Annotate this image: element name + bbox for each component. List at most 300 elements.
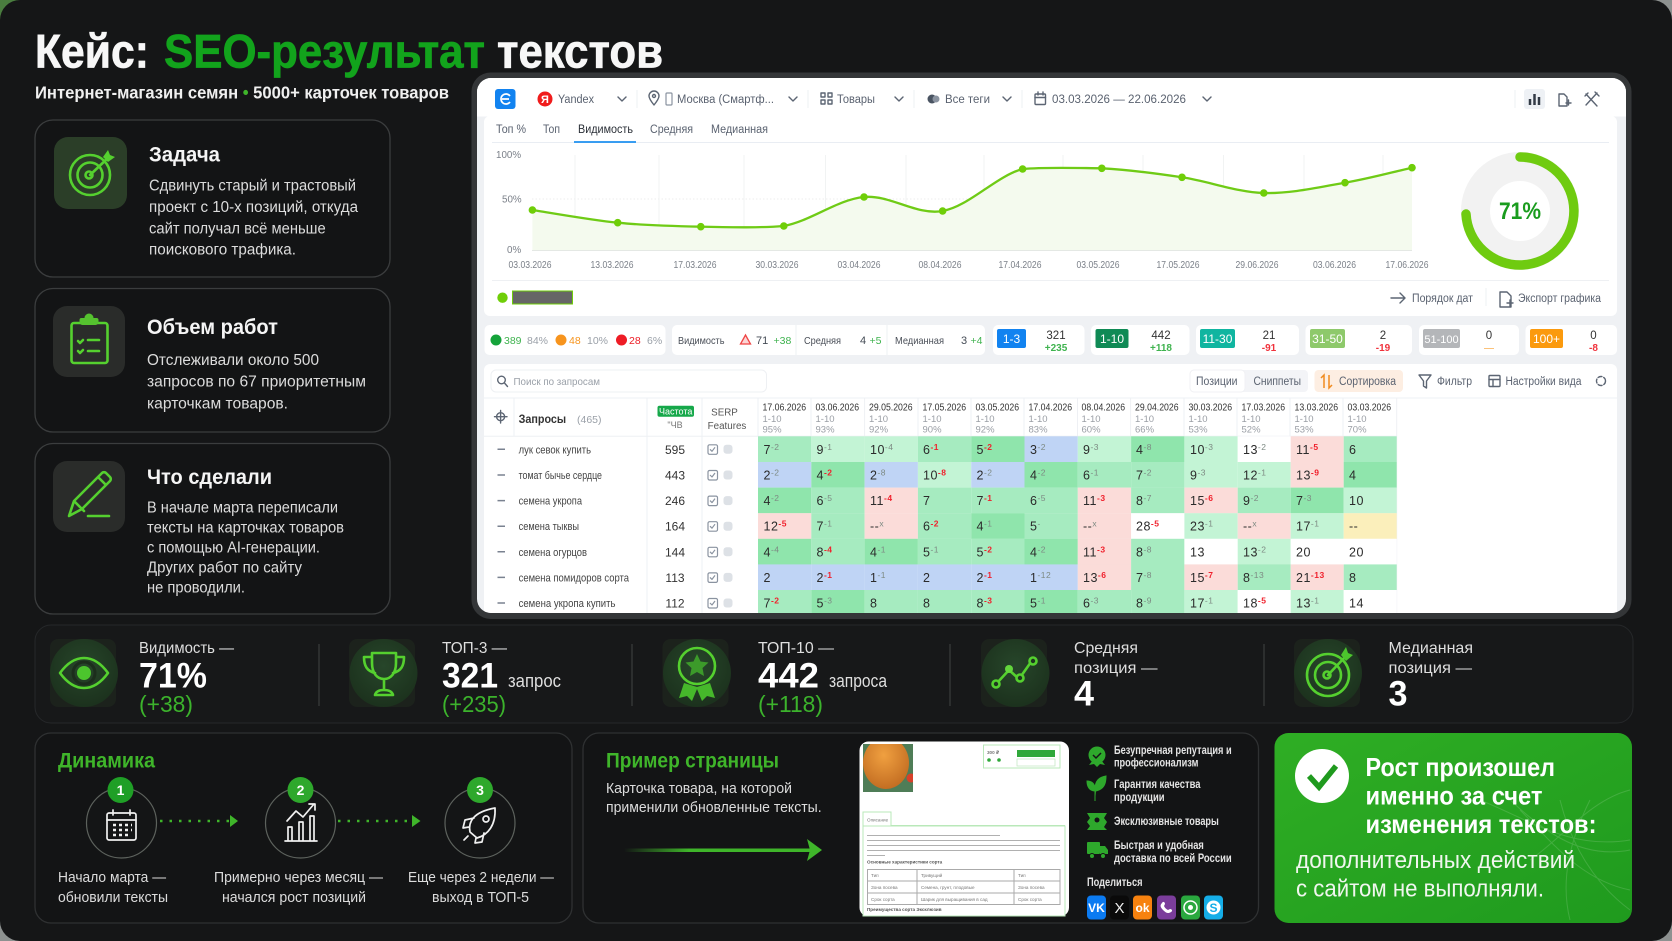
buy box: 300 ₽	[987, 750, 1000, 755]
callout heading: изменения текстов:	[1366, 809, 1596, 839]
table header: 1-10	[1028, 414, 1048, 425]
table header: 1-10	[1082, 414, 1101, 425]
table row: семена огурцов: -1	[930, 544, 939, 554]
table header: 13.03.2026	[1294, 403, 1338, 414]
text: scope	[147, 352, 366, 412]
search box: Поиск по запросам	[514, 376, 600, 388]
table row: семена огурцов: 5	[976, 545, 984, 559]
characteristics table: Шарик для выращивания в сад	[921, 897, 988, 902]
table row: семена укропа: -5	[824, 493, 833, 503]
step 2: growth chart	[214, 777, 383, 906]
table header: 1-10	[976, 414, 995, 425]
table row: семена укропа: семена укропа	[519, 496, 582, 508]
table row: семена укропа купить: 5	[816, 596, 824, 610]
chart tabs: Видимость	[578, 124, 633, 136]
stat: position 11-30: 21	[1263, 330, 1275, 342]
icon: WhatsApp	[1181, 896, 1200, 920]
table row: семена тыквы: -	[1037, 519, 1041, 529]
line chart: visibility: 17.05.2026	[1156, 260, 1200, 271]
table row: семена укропа: 6	[1030, 494, 1037, 508]
table row: семена укропа купить: 17	[1190, 596, 1205, 610]
table header: 03.05.2026	[976, 403, 1019, 414]
table row: семена огурцов: 8	[816, 545, 824, 559]
table row: семена помидоров сорта: 8	[1349, 571, 1356, 585]
table row: семена укропа купить: -1	[1037, 596, 1046, 606]
table row: семена тыквы: x	[879, 519, 884, 529]
table row: лук севок купить: -2	[984, 442, 993, 452]
stat: visibility / mean / median: 3	[961, 335, 967, 347]
table row: семена помидоров сорта: семена помидоров сорта	[519, 572, 629, 584]
toolbar	[477, 78, 1626, 116]
table row: семена укропа купить: 8	[1136, 596, 1143, 610]
metric: visibility: Видимость —	[139, 640, 234, 657]
feature list: доставка по всей России	[1114, 853, 1232, 865]
table row: семена огурцов	[498, 539, 1397, 564]
table row: томат бычье сердце	[498, 462, 1397, 488]
stat: position 100+	[1526, 325, 1617, 355]
table row: томат бычье сердце: -8	[877, 468, 886, 478]
table row: лук севок купить: 3	[1030, 443, 1037, 457]
table row: семена тыквы: -1	[1311, 519, 1319, 529]
metric: median position: 3	[1388, 675, 1408, 714]
stat: position 1-10: 1-10	[1100, 332, 1124, 346]
panel: page example	[583, 733, 1258, 923]
table row: томат бычье сердце: 7	[1136, 468, 1143, 482]
characteristics table	[868, 870, 1060, 904]
line chart: visibility: 08.04.2026	[918, 260, 962, 271]
table row: семена помидоров сорта: -13	[1311, 570, 1325, 580]
table row: семена укропа купить: -3	[984, 596, 993, 606]
step 1: calendar: Начало марта —	[58, 869, 166, 886]
panel: positions table	[484, 364, 1617, 624]
table row: семена огурцов: 144	[665, 545, 685, 559]
toolbar: Я	[541, 94, 549, 106]
metric: median position: позиция —	[1388, 660, 1472, 677]
table row: семена укропа купить: -3	[824, 596, 833, 606]
table header: 1-10	[1135, 414, 1154, 425]
chart tabs: Медианная	[711, 124, 768, 136]
table row: семена тыквы: --	[1083, 520, 1092, 534]
arrow: to page screenshot	[624, 839, 822, 861]
icon: VK: VK	[1088, 901, 1105, 915]
icon: X: X	[1114, 900, 1125, 917]
table row: семена огурцов: -4	[824, 544, 833, 554]
panel: dynamics	[35, 733, 572, 923]
table row: лук севок купить: 9	[816, 443, 824, 457]
table row: томат бычье сердце: -1	[1258, 468, 1266, 478]
text: done	[147, 500, 344, 597]
table header: 03.06.2026	[816, 403, 859, 414]
table row: семена огурцов: 13	[1190, 545, 1205, 559]
stat: position 31-50: 31-50	[1312, 332, 1343, 346]
table row: семена огурцов: 4	[1030, 545, 1037, 559]
metric: visibility: 71%	[139, 657, 207, 696]
table row: томат бычье сердце: -9	[1311, 468, 1319, 478]
table row: томат бычье сердце: 12	[1243, 468, 1258, 482]
stat: position 1-10: +118	[1150, 343, 1172, 354]
table row: семена тыквы: 17	[1296, 520, 1311, 534]
text: scope: карточкам товаров.	[147, 395, 288, 412]
table row: семена помидоров сорта: 15	[1190, 571, 1205, 585]
table row: семена укропа купить: 6	[1083, 596, 1090, 610]
feature list: Гарантия качества	[1114, 779, 1201, 791]
table row: лук севок купить: -3	[1205, 442, 1213, 452]
table row: томат бычье сердце: 443	[665, 468, 685, 482]
table row: семена помидоров сорта: 1	[870, 571, 877, 585]
table row: семена укропа купить: 5	[1030, 596, 1037, 610]
chart tabs: Топ	[543, 124, 560, 136]
table header: 52%	[1242, 425, 1261, 436]
chart tabs	[492, 124, 1609, 142]
table header: 17.04.2026	[1028, 403, 1072, 414]
callout text: дополнительных действий	[1296, 847, 1575, 874]
table row: лук севок купить: 10	[870, 443, 885, 457]
stat: position 11-30: 11-30	[1203, 332, 1233, 346]
stat: position 1-3: 1-3	[1003, 332, 1020, 346]
table row: семена помидоров сорта: 113	[665, 571, 685, 585]
table row: лук севок купить: -2	[771, 442, 780, 452]
table row: семена помидоров сорта: -13	[1250, 570, 1264, 580]
table row: семена укропа купить: -1	[1311, 596, 1319, 606]
table toolbar: Настройки вида	[1506, 376, 1582, 388]
line chart: visibility: 13.03.2026	[590, 260, 634, 271]
icon: clipboard	[53, 306, 125, 377]
table row: томат бычье сердце: 2	[870, 468, 877, 482]
page screenshot	[860, 737, 1069, 916]
table row: семена тыквы: 5	[1030, 520, 1037, 534]
text: page example	[606, 780, 822, 816]
table row: лук севок купить: -1	[930, 442, 939, 452]
metric: median position	[1294, 639, 1473, 714]
table row: семена помидоров сорта: -1	[984, 570, 993, 580]
text: task: поискового трафика.	[149, 242, 296, 259]
metric: visibility: (+38)	[139, 691, 193, 717]
table row: семена огурцов: -3	[1097, 544, 1106, 554]
step 1: calendar	[58, 777, 168, 906]
feature list: профессионализм	[1114, 758, 1198, 770]
heading: dynamics: Динамика	[58, 750, 155, 772]
table row: семена укропа: 11	[1083, 494, 1097, 508]
stat: position 1-3: 321	[1046, 330, 1066, 342]
table header: 1-10	[922, 414, 942, 425]
table header: 53%	[1294, 425, 1314, 436]
stat: position 31-50: -19	[1376, 343, 1391, 354]
table row: лук севок купить	[498, 436, 1397, 462]
icon: pencil	[53, 461, 125, 532]
stat: position 11-30	[1196, 325, 1299, 355]
characteristics table: Зона посева	[871, 885, 898, 890]
metric: median position: Медианная	[1388, 640, 1473, 657]
stat: visibility / mean / median	[672, 325, 985, 355]
table row: томат бычье сердце: -2	[1037, 468, 1046, 478]
icon: Viber	[1157, 896, 1176, 920]
toolbar: Товары	[837, 94, 875, 106]
table header: 1-10	[762, 414, 782, 425]
table header: 30.03.2026	[1188, 403, 1232, 414]
chart footer	[492, 280, 1609, 307]
table header: 17.06.2026	[762, 403, 806, 414]
callout: conclusion	[1274, 733, 1632, 923]
table row: томат бычье сердце: 10	[923, 468, 938, 482]
table row: семена помидоров сорта: 2	[976, 571, 984, 585]
description tab: Описание	[867, 818, 889, 822]
table header: 93%	[816, 425, 835, 436]
text: task: проект с 10-х позиций, откуда	[149, 199, 358, 216]
table row: семена помидоров сорта: 2	[923, 571, 930, 585]
table row: семена укропа купить	[498, 590, 1397, 613]
stat: visibility / mean / median: +4	[970, 335, 983, 347]
table row: семена тыквы	[498, 513, 1397, 539]
table header: Запросы	[519, 412, 566, 426]
chart footer: Экспорт графика	[1518, 293, 1602, 305]
table header: 17.03.2026	[1242, 403, 1285, 414]
table row: семена тыквы: 12	[764, 520, 778, 534]
table header: 1-10	[1294, 414, 1314, 425]
stat: rank counts	[484, 325, 666, 355]
text: scope: Отслеживали около 500	[147, 352, 319, 369]
title: SEO-результат	[164, 24, 485, 78]
table row: семена тыквы: -2	[930, 519, 939, 529]
feature list	[1087, 745, 1232, 865]
feature list: Безупречная репутация и	[1114, 745, 1232, 757]
table row: семена помидоров сорта: 2	[816, 571, 824, 585]
icon: shield badge	[1088, 746, 1106, 767]
metric: average position: позиция —	[1074, 660, 1158, 677]
table row: семена тыквы: 164	[665, 520, 685, 534]
subtitle: Интернет-магазин семян • 5000+ карточек товаров	[35, 82, 449, 102]
feature list: продукции	[1114, 792, 1165, 804]
line chart: visibility: 30.03.2026	[756, 260, 799, 271]
share block	[1087, 877, 1223, 920]
callout heading: именно за счет	[1366, 780, 1543, 810]
text: done: В начале марта переписали	[147, 500, 338, 517]
table row: семена укропа	[498, 488, 1397, 513]
table row: семена тыквы: --	[1243, 520, 1252, 534]
table row: лук севок купить: 6	[923, 443, 930, 457]
heading: task: Задача	[149, 143, 221, 167]
table row: семена укропа: -4	[884, 493, 893, 503]
icon: medal	[662, 639, 731, 707]
table row: семена тыквы: x	[1092, 519, 1097, 529]
icon: exclusive	[1087, 813, 1107, 830]
table row: семена тыквы: 28	[1136, 520, 1151, 534]
table row: лук севок купить: 7	[764, 443, 771, 457]
line chart: visibility: 03.06.2026	[1313, 260, 1356, 271]
step 3: rocket: выход в ТОП-5	[432, 889, 529, 906]
table row: лук севок купить: -1	[824, 442, 833, 452]
table row: семена укропа купить: 13	[1296, 596, 1311, 610]
line chart: visibility: 17.04.2026	[998, 260, 1042, 271]
table row: семена тыквы: -5	[778, 519, 787, 529]
icon: leaf	[1087, 776, 1106, 801]
callout heading: Рост произошел	[1366, 752, 1555, 782]
line chart: visibility: 100%	[496, 150, 521, 161]
table row: томат бычье сердце: 4	[1030, 468, 1037, 482]
title: Кейс:	[35, 24, 149, 78]
stat: position 1-10	[1091, 325, 1190, 355]
table row: лук севок купить: -2	[1258, 442, 1266, 452]
table header: 1-10	[816, 414, 835, 425]
table row: семена тыквы: семена тыквы	[519, 521, 579, 533]
stat: position 100+: 0	[1590, 330, 1597, 342]
donut gauge: 71%: 71%	[1499, 198, 1541, 225]
stat: position 51-100: 51-100	[1424, 334, 1459, 346]
table row: семена укропа: 15	[1190, 494, 1205, 508]
table row: семена укропа: -3	[1097, 493, 1106, 503]
feature list: Эксклюзивные товары	[1114, 816, 1219, 828]
chart tabs: Топ %	[496, 124, 526, 136]
table row: семена укропа купить: -2	[771, 596, 780, 606]
table header: 29.05.2026	[869, 403, 913, 414]
table row: лук севок купить: -3	[1090, 442, 1099, 452]
table header: 1-10	[1242, 414, 1261, 425]
table row: семена помидоров сорта: -7	[1205, 570, 1213, 580]
table header: 92%	[976, 425, 995, 436]
table header: 29.04.2026	[1135, 403, 1179, 414]
stat: rank counts: 389	[504, 335, 522, 347]
table row: семена помидоров сорта: 13	[1083, 571, 1098, 585]
characteristics table: Семена, грунт, плодовые	[921, 885, 975, 890]
stat: rank counts: 6%	[647, 335, 662, 347]
table row: семена помидоров сорта: -6	[1098, 570, 1106, 580]
text: task: сайт получал всё меньше	[149, 220, 326, 237]
stat: rank counts: 84%	[527, 335, 548, 347]
table row: семена огурцов: -8	[1143, 544, 1152, 554]
table row: семена укропа: -5	[1037, 493, 1046, 503]
donut gauge: 71%	[1466, 157, 1574, 265]
table row: семена огурцов: 8	[1136, 545, 1143, 559]
toolbar: Yandex	[558, 94, 594, 106]
table row: семена укропа: -3	[1303, 493, 1312, 503]
characteristics table: Срок сорта	[1018, 897, 1042, 902]
table header: 17.05.2026	[922, 403, 966, 414]
panel: key metrics	[35, 625, 1633, 723]
table row: семена укропа: 8	[1136, 494, 1143, 508]
step 3: rocket: Еще через 2 недели —	[408, 869, 554, 886]
page screenshot: Преимущества сорта Эксклюзив	[867, 907, 942, 912]
table row: семена укропа: 9	[1243, 494, 1250, 508]
table row: семена укропа: 6	[816, 494, 824, 508]
callout text: с сайтом не выполняли.	[1296, 876, 1544, 903]
table header: SERP	[711, 408, 738, 418]
table row: семена укропа купить: семена укропа купить	[519, 598, 616, 610]
table row: семена укропа купить: 8	[976, 596, 984, 610]
heading: done: Что сделали	[147, 465, 272, 489]
table row: лук севок купить: 4	[1136, 443, 1143, 457]
table row: лук севок купить: лук севок купить	[519, 444, 591, 456]
line chart: visibility: 0%	[507, 245, 521, 256]
characteristics table: Зона посева	[1018, 885, 1045, 890]
title: текстов	[497, 24, 663, 78]
description tab: Основные характеристики сорта	[867, 860, 943, 864]
stat: position 31-50: 2	[1380, 330, 1386, 342]
table row: семена помидоров сорта: 7	[1136, 571, 1143, 585]
table row: семена огурцов: 4	[870, 545, 877, 559]
table row: семена укропа купить: -5	[1258, 596, 1266, 606]
table row: семена укропа купить: 7	[764, 596, 771, 610]
text: page example: применили обновленные тексты.	[606, 799, 822, 816]
metric: average position	[981, 639, 1158, 714]
table row: томат бычье сердце: -1	[1090, 468, 1099, 478]
table row: семена помидоров сорта: -12	[1037, 570, 1051, 580]
table header: 83%	[1028, 425, 1048, 436]
metric: top 3	[349, 639, 561, 717]
icon: check mark	[1295, 749, 1349, 803]
table toolbar: Сниппеты	[1254, 376, 1301, 388]
icon: OK: ok	[1135, 901, 1150, 915]
table row: семена укропа купить: 8	[923, 596, 930, 610]
table header: 60%	[1082, 425, 1101, 436]
table row: семена укропа купить: -1	[1205, 596, 1213, 606]
table row: томат бычье сердце: -3	[1197, 468, 1206, 478]
chart tabs: Средняя	[650, 124, 693, 136]
arrow: step 2 to 3	[338, 815, 420, 827]
table row: семена тыквы: -1	[1205, 519, 1213, 529]
stat: rank counts: 48	[569, 335, 581, 347]
table row: семена огурцов: -1	[877, 544, 886, 554]
table toolbar: Сортировка	[1339, 376, 1397, 388]
table header: 95%	[762, 425, 782, 436]
search box	[491, 370, 766, 392]
table row: семена тыквы: --	[870, 520, 879, 534]
text: task	[149, 178, 358, 259]
table row: семена укропа купить: -3	[1090, 596, 1099, 606]
table row: семена тыквы: -1	[984, 519, 993, 529]
table row: лук севок купить: 10	[1190, 443, 1205, 457]
table row: семена огурцов: 5	[923, 545, 930, 559]
heading: scope: Объем работ	[147, 315, 278, 339]
table header: 70%	[1348, 425, 1367, 436]
table row: лук севок купить: 13	[1243, 443, 1258, 457]
stat: visibility / mean / median: Медианная	[895, 335, 944, 347]
table row: семена огурцов: 13	[1243, 545, 1258, 559]
table row: томат бычье сердце: -2	[771, 468, 780, 478]
table row: семена огурцов: -4	[771, 544, 780, 554]
table row: семена укропа купить: 8	[870, 596, 877, 610]
stat: visibility / mean / median: 4	[860, 335, 866, 347]
characteristics table: Тип	[871, 873, 879, 878]
heading: page example: Пример страницы	[606, 750, 779, 772]
table row: семена тыквы: --	[1349, 520, 1358, 534]
chart footer: Порядок дат	[1412, 293, 1474, 305]
stat: position 1-3: +235	[1045, 343, 1068, 354]
table row: семена укропа купить: 18	[1243, 596, 1258, 610]
table row: томат бычье сердце: -8	[938, 468, 946, 478]
share block: Поделиться	[1087, 877, 1142, 889]
table row: семена помидоров сорта	[498, 564, 1397, 590]
arrow: step 1 to 2	[160, 815, 238, 827]
table row: семена тыквы: 6	[923, 520, 930, 534]
table row: семена помидоров сорта: 2	[764, 571, 771, 585]
line chart: visibility: 17.06.2026	[1386, 260, 1429, 271]
table row: семена помидоров сорта: 21	[1296, 571, 1311, 585]
table row: лук севок купить: -2	[1037, 442, 1046, 452]
panel: chart	[484, 116, 1617, 316]
table row: лук севок купить: 9	[1083, 443, 1090, 457]
table header: Features	[708, 421, 746, 432]
toolbar: 03.03.2026 — 22.06.2026	[1052, 94, 1186, 106]
text: done: тексты на карточках товаров	[147, 520, 344, 537]
table row: томат бычье сердце: -2	[984, 468, 993, 478]
step 1: calendar: 1	[117, 782, 125, 798]
stat: position 51-100: —	[1484, 343, 1494, 354]
stat: position 100+: -8	[1589, 343, 1598, 354]
step 3: rocket: 3	[476, 782, 484, 798]
stat: visibility / mean / median: Видимость	[678, 335, 725, 347]
table row: семена укропа: -1	[984, 493, 993, 503]
line chart: visibility: 03.03.2026	[508, 260, 552, 271]
table row: томат бычье сердце: -2	[824, 468, 833, 478]
